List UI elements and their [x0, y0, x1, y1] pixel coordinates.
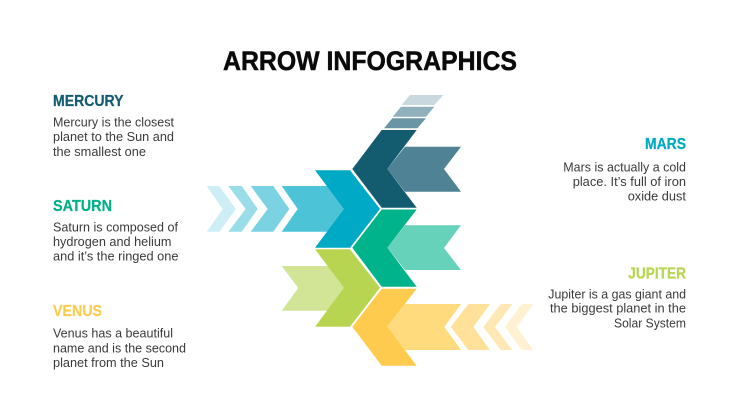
- heading: saturn: SATURN: [53, 198, 112, 215]
- heading: jupiter: JUPITER: [628, 265, 686, 282]
- heading: mercury: MERCURY: [53, 93, 124, 110]
- text block: mercury description: [53, 115, 174, 159]
- arrow: mars green: [352, 210, 461, 287]
- text block: saturn description: [53, 220, 178, 264]
- text block: venus description: [53, 326, 186, 370]
- arrow: mercury dark teal: [352, 95, 461, 208]
- panel: mercury text: [53, 93, 174, 159]
- text block: mercury description: Mercury is the closest: [53, 115, 174, 130]
- text block: jupiter description: the biggest planet in the: [550, 301, 686, 316]
- arrow: saturn blue: [207, 170, 380, 248]
- panel: jupiter text: [548, 265, 686, 330]
- text block: saturn description: and it’s the ringed one: [53, 249, 178, 264]
- text block: venus description: planet from the Sun: [53, 355, 164, 370]
- text block: mars description: [563, 160, 686, 204]
- arrow: venus lime: [282, 249, 380, 327]
- heading: mars: MARS: [645, 136, 686, 153]
- panel: venus text: [53, 303, 186, 370]
- text block: saturn description: hydrogen and helium: [53, 234, 172, 249]
- heading: venus: VENUS: [53, 303, 102, 320]
- text block: venus description: name and is the second: [53, 340, 186, 355]
- text block: mars description: Mars is actually a cold: [563, 160, 686, 175]
- panel: mars text: [563, 136, 686, 204]
- text block: jupiter description: Solar System: [614, 315, 686, 330]
- title: ARROW INFOGRAPHICS: [223, 46, 517, 76]
- text block: mars description: oxide dust: [628, 189, 686, 204]
- panel: saturn text: [53, 198, 178, 264]
- text block: jupiter description: Jupiter is a gas giant and: [548, 286, 686, 301]
- text block: saturn description: Saturn is composed of: [53, 220, 178, 235]
- text block: venus description: Venus has a beautiful: [53, 326, 173, 341]
- arrow: jupiter yellow: [352, 289, 533, 366]
- text block: jupiter description: [548, 286, 686, 330]
- text block: mercury description: planet to the Sun and: [53, 129, 174, 144]
- text block: mars description: place. It’s full of iron: [573, 174, 686, 189]
- text block: mercury description: the smallest one: [53, 144, 146, 159]
